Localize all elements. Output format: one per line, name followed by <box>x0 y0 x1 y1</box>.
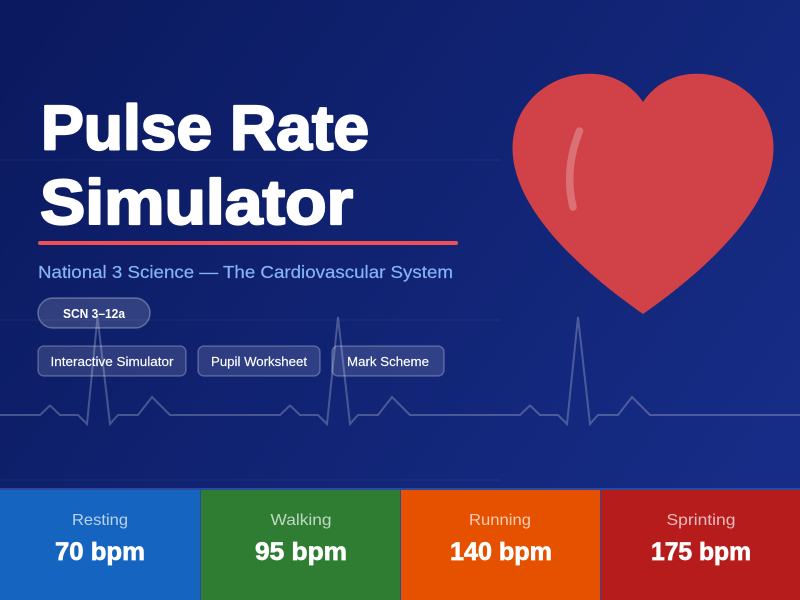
stat: Running <box>401 490 600 600</box>
icon: heart <box>512 74 774 314</box>
title <box>40 94 369 238</box>
tag: Mark Scheme <box>332 346 444 376</box>
tag: Pupil Worksheet <box>198 346 320 376</box>
stat: Resting: Resting <box>72 512 128 529</box>
curriculum code pill <box>38 298 150 328</box>
stat: Resting <box>0 490 200 600</box>
stat: Running: Running <box>469 512 531 529</box>
tag: Interactive Simulator: Interactive Simulator <box>50 354 174 369</box>
stat: Sprinting <box>601 490 800 600</box>
stat: Walking: Walking <box>270 512 332 529</box>
stats bar <box>0 488 800 600</box>
stat: Running: 140 bpm <box>450 538 552 566</box>
curriculum code pill: SCN 3–12a <box>63 307 126 321</box>
tag: Pupil Worksheet: Pupil Worksheet <box>211 354 307 369</box>
ECG trace <box>0 317 800 424</box>
subtitle: National 3 Science — The Cardiovascular System <box>38 262 453 282</box>
stat: Resting: 70 bpm <box>55 538 145 566</box>
title underline <box>38 241 458 245</box>
stat: Walking: 95 bpm <box>255 538 347 566</box>
tag: Mark Scheme: Mark Scheme <box>347 354 429 369</box>
stat: Sprinting: 175 bpm <box>651 538 751 566</box>
title: Pulse Rate <box>41 94 369 164</box>
title: Simulator <box>40 168 353 238</box>
heart highlight <box>570 131 580 207</box>
stat: Walking <box>201 490 400 600</box>
stat: Sprinting: Sprinting <box>666 512 736 529</box>
tag: Interactive Simulator <box>38 346 186 376</box>
